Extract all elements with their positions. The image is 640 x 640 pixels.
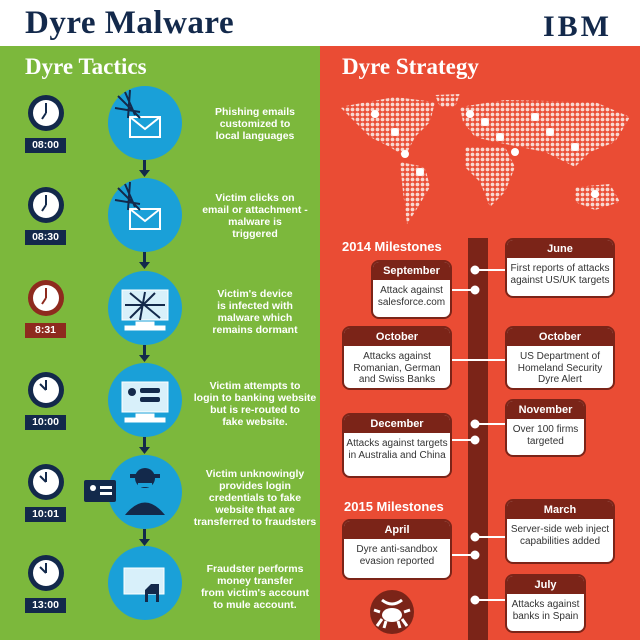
step texts: local languages [216, 130, 294, 142]
text: to mule account. [213, 599, 297, 611]
text: remains dormant [212, 324, 298, 336]
milestone: September: Attack against salesforce.com [378, 285, 445, 308]
text: transferred to fraudsters [194, 516, 316, 528]
text: fake website. [222, 416, 288, 428]
step texts: Phishing emails [215, 106, 295, 118]
milestone: July: Attacks against banks in Spain [512, 599, 579, 622]
step texts [215, 106, 295, 142]
text: provides login [219, 480, 291, 492]
text: but is re-routed to [210, 404, 300, 416]
text: 13:00 [32, 599, 59, 611]
milestone: March: March [544, 504, 576, 516]
title: Dyre Malware [25, 5, 234, 41]
envelopes / monitors [122, 117, 168, 594]
text: credentials to fake [209, 492, 301, 504]
milestone: November [505, 399, 586, 457]
milestone: December: Attacks against targets in Australia and China [346, 438, 448, 460]
text: Victim's device [217, 288, 293, 300]
milestone: March [505, 499, 615, 564]
text: Fraudster performs [207, 563, 303, 575]
milestone: October right [505, 326, 615, 390]
panel: tactics [0, 46, 320, 640]
milestone: July [505, 574, 586, 633]
text: money transfer [217, 575, 293, 587]
milestone: November: Over 100 firms targeted [513, 424, 578, 446]
milestone: October right: October [539, 331, 581, 343]
text: Victim attempts to [210, 380, 300, 392]
heading: tactics: Dyre Tactics [25, 54, 147, 79]
milestone: June: First reports of attacks against US/UK targets [511, 263, 609, 286]
time labels: 08:00 [32, 139, 59, 151]
text: login to banking website [194, 392, 316, 404]
heading: 2015 milestones: 2015 Milestones [344, 499, 444, 514]
milestone: March: Server-side web inject capabilities added [511, 524, 609, 546]
text: 8:31 [35, 324, 56, 336]
heading: strategy: Dyre Strategy [342, 54, 479, 79]
step texts: customized to [220, 118, 290, 130]
text: 10:01 [32, 508, 59, 520]
text: 10:00 [32, 416, 59, 428]
milestone: October left: Attacks against Romanian, German and Swiss Banks [353, 351, 441, 385]
text: malware which [218, 312, 292, 324]
timeline bar [468, 238, 488, 640]
milestone: October left [342, 326, 452, 390]
milestone: December [342, 413, 452, 478]
world map [341, 94, 629, 224]
text: triggered [232, 228, 278, 240]
text: Victim clicks on [215, 192, 295, 204]
milestone: April: Dyre anti-sandbox evasion reported [356, 544, 438, 566]
milestone: July: July [534, 579, 556, 591]
heading: 2014 milestones: 2014 Milestones [342, 239, 442, 254]
milestone: April: April [384, 524, 410, 536]
milestone: June: June [547, 243, 573, 255]
text: 08:30 [32, 231, 59, 243]
connectors [452, 266, 505, 560]
milestone: November: November [519, 404, 572, 416]
id card [84, 480, 116, 502]
milestone: April [342, 519, 452, 580]
text: is infected with [217, 300, 293, 312]
text: from victim's account [201, 587, 309, 599]
milestone: June [505, 238, 615, 298]
text: malware is [228, 216, 282, 228]
milestone: October right: US Department of Homeland Security Dyre Alert [518, 351, 602, 385]
tactics graphics [28, 86, 182, 620]
panel: strategy [320, 46, 640, 640]
icon: bug [370, 590, 414, 634]
milestone: September: September [383, 265, 440, 277]
text: Victim unknowingly [206, 468, 304, 480]
step icons [108, 86, 182, 620]
text: email or attachment - [202, 204, 308, 216]
milestone: September [371, 260, 452, 319]
text: website that are [215, 504, 295, 516]
milestone: December: December [370, 418, 424, 430]
milestone: October left: October [376, 331, 418, 343]
time labels [25, 138, 66, 153]
logo: IBM: IBM [543, 10, 612, 43]
clocks [28, 95, 64, 591]
